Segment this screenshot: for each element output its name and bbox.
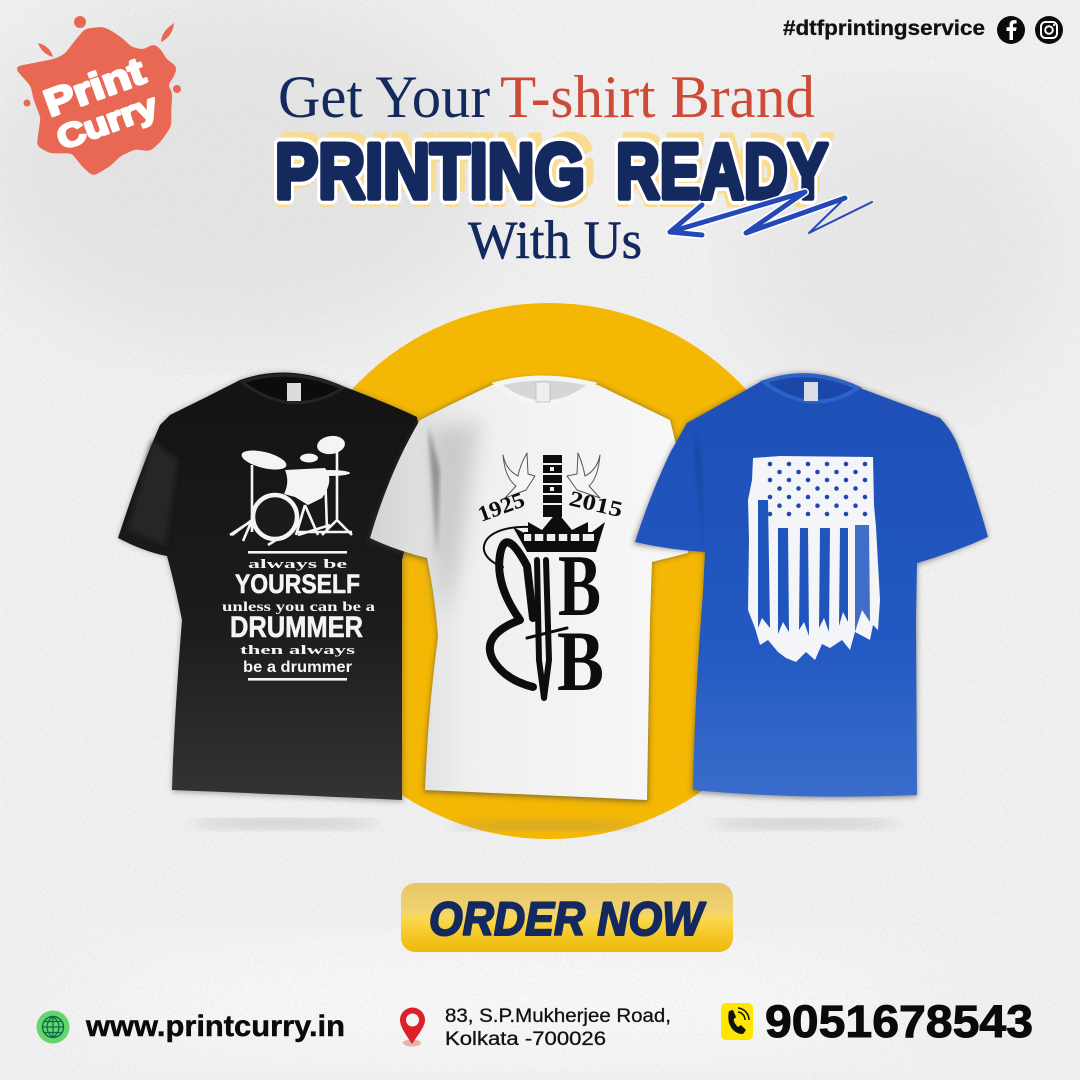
toms [284,468,329,505]
headline outline: PRINTING [275,127,585,215]
icon: map pin [400,1008,425,1046]
address text: Kolkata -700026 [445,1029,606,1050]
shirt floor shadows [190,819,900,830]
black shirt collar [242,375,343,403]
print slogan: unless you can be a [222,600,375,615]
logo word: Print: Print [39,50,151,125]
print: years [474,486,625,527]
flag stars [770,464,866,514]
flag white field [748,456,880,662]
print: years: 2015 [567,486,625,522]
print: double B: B [558,538,601,635]
black shirt body [118,372,425,800]
blue shirt body [635,373,988,797]
white shirt body [370,378,690,800]
flag blue stripes [758,500,870,636]
headline shadow [274,118,833,221]
website text: www.printcurry.in [85,1010,345,1043]
white shirt collar [497,378,592,403]
title line: T-shirt Brand: T-shirt Brand [500,64,815,130]
blue shirt tag [804,382,818,401]
print: doves [503,453,600,498]
contact: address [400,1006,671,1050]
panel: blue t-shirt [633,373,988,799]
print slogan: YOURSELF [235,569,360,599]
address text [445,1006,671,1050]
print: double B: B [557,613,604,709]
headline shadow: READY [615,133,820,221]
yellow circle [281,303,817,839]
logo: Print Curry splat [14,16,181,176]
logo droplets [24,16,181,106]
hashtag: #dtfprintingservice [783,17,985,40]
address text: 83, S.P.Mukherjee Road, [445,1006,671,1027]
print: swirl monogram [484,527,567,698]
phone number: 9051678543 [765,996,1033,1047]
icon: globe [36,1010,70,1044]
black shirt folds [128,440,178,545]
bass drum [253,495,297,539]
headline shadow: PRINTING [280,118,595,206]
headline: PRINTING READY [275,127,828,215]
headline shadow: READY [621,118,833,206]
white shirt sleeve fold [428,425,440,555]
print slogan: then always [240,642,355,657]
icon: instagram [1035,16,1063,44]
contact: website [36,1010,345,1044]
print: distressed flag [748,456,880,662]
print: years: 1925 [474,487,528,527]
icon: phone [721,1003,753,1040]
print slogan [222,551,375,681]
icon: facebook [997,16,1025,44]
title line: With Us: With Us [468,210,642,270]
order now button [401,883,733,952]
black shirt drop shadow [118,372,425,802]
white shirt outline shadow [368,378,690,802]
black shirt tag [287,383,301,401]
button label: ORDER NOW [429,892,706,945]
headline: PRINTING READY: PRINTING [275,127,585,215]
headline shadow: PRINTING [274,133,589,221]
cymbals [240,434,350,476]
logo splat shape [14,27,177,176]
panel: white t-shirt [368,378,690,802]
white shirt tag [536,382,550,402]
headline outline: READY [616,127,828,215]
print: double B [557,538,604,709]
panel: black t-shirt [118,372,425,802]
print: tower [543,455,562,517]
stands [230,450,352,545]
print slogan: always be [248,556,347,571]
print slogan: be a drummer [243,659,352,676]
headline: PRINTING READY: READY [616,127,828,215]
blue shirt sleeve fold [694,430,704,550]
print: crown [513,512,605,552]
white shirt shading [430,420,480,620]
blue shirt shadow [633,373,988,799]
title line: Get Your: Get Your [278,64,490,130]
arrow scribble [670,192,872,235]
headline outline [275,127,828,215]
blue shirt collar [764,375,858,402]
print slogan: DRUMMER [230,611,363,644]
logo word: Curry: Curry [52,86,163,157]
title [274,64,872,270]
print: drum kit [230,434,352,545]
contact: phone [721,996,1033,1047]
